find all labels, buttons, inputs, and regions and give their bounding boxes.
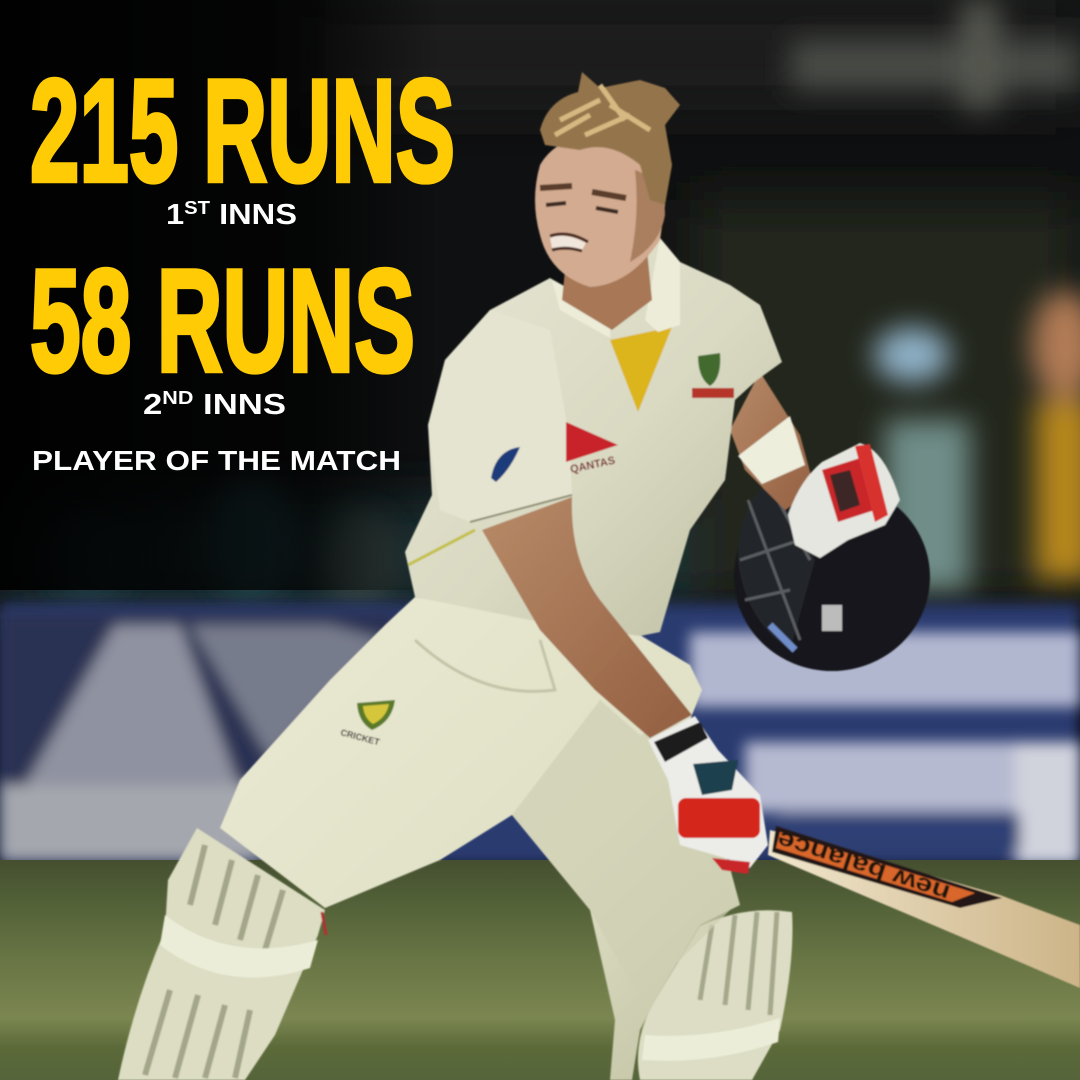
label: 1st innings: 1 [166,199,182,231]
icon: Cricket Australia badge [339,700,395,747]
neck [562,230,652,330]
bat label: new balance: new balance [774,825,953,907]
bat [570,738,1080,988]
shirt [405,238,782,636]
left dark fade behind headings [0,0,440,590]
label: player of the match: PLAYER OF THE MATCH [32,445,401,476]
icon: Qantas logo [566,422,618,476]
heading: 215 runs: 215 RUNS [30,49,455,212]
front pad (left leg) [118,828,326,1080]
background: grass field [0,860,1080,1080]
helmet [734,482,930,671]
icon: Cricket Australia badge: CRICKET [339,727,381,747]
label: 1st innings: INNS [210,199,297,231]
trousers [220,597,740,1080]
icon: Australia crest [692,353,734,398]
label: 2nd innings: ND [162,388,193,408]
head [535,134,665,287]
background: blurred advertising board [0,604,1080,866]
rear pad (right leg) [638,910,792,1080]
icon: asics logo [491,447,520,482]
label: 2nd innings: INNS [193,389,286,421]
right glove (holding helmet) [788,443,900,558]
label: 1st innings: ST [184,198,210,218]
left glove (holding bat) [648,716,768,874]
heading: 58 runs: 58 RUNS [30,239,415,402]
label: 2nd innings: 2 [143,389,159,421]
icon: Qantas logo: QANTAS [569,455,616,476]
shirt sleeve [428,310,572,522]
hair [540,72,680,205]
background: dark stadium crowd [0,0,1080,620]
right upper arm and wrist [730,372,815,510]
left forearm [482,497,692,738]
